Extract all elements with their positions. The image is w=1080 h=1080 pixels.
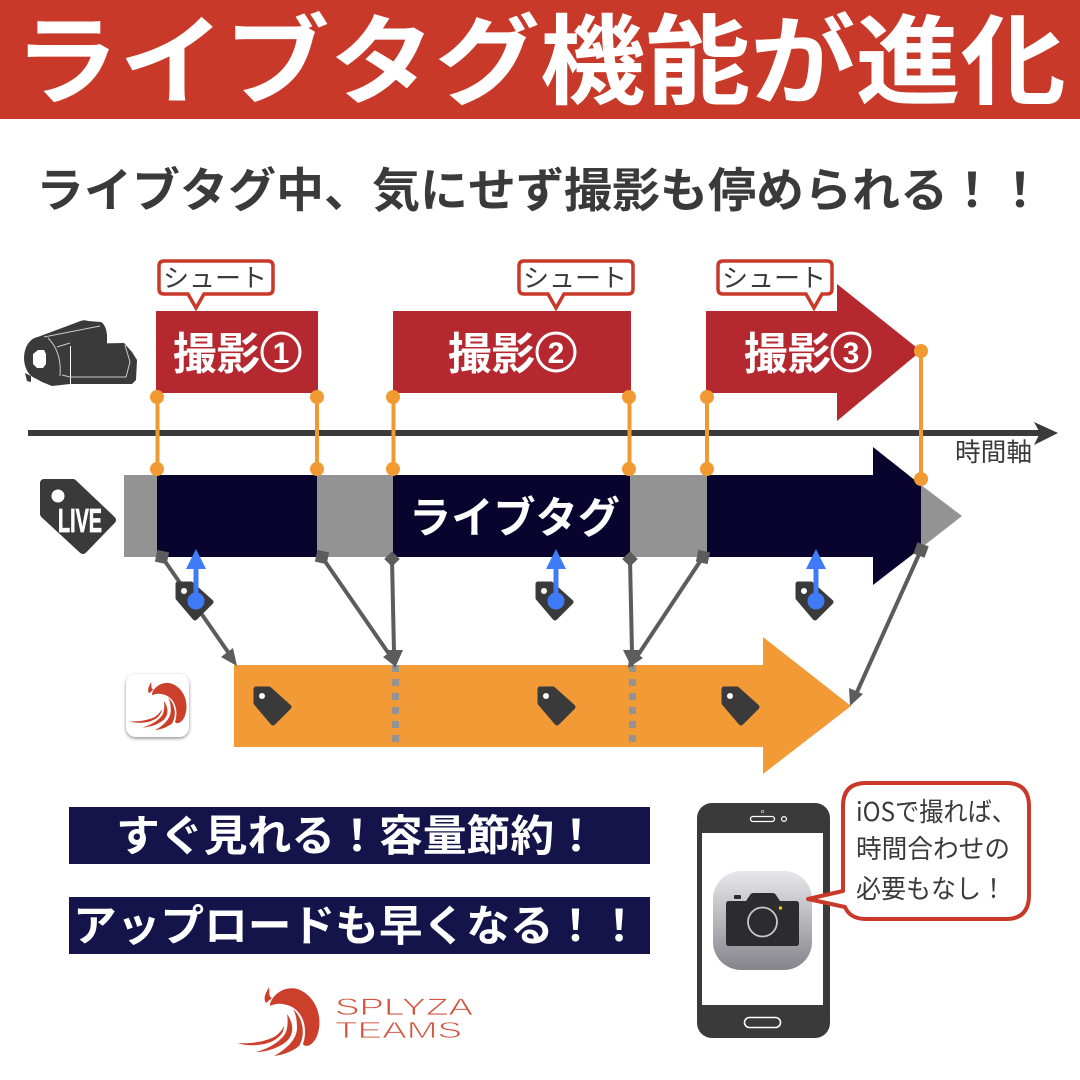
arrows: gray connectors from live bar to app bar: [155, 542, 929, 706]
callout: shoot 3: [718, 258, 832, 308]
shooting block 1: [156, 311, 318, 393]
callout: shoot 2: [519, 258, 633, 308]
callout: iOS speech bubble: 時間合わせの: [856, 829, 1010, 866]
icon: camera app: [713, 871, 812, 970]
shooting block 3 arrow: 撮影: [744, 318, 831, 382]
banner: faster upload: アップロードも早くなる！！: [73, 892, 641, 954]
shooting block 3 arrow: [706, 284, 921, 421]
dotted cut markers: [392, 665, 636, 742]
shooting block 1: 1: [273, 337, 289, 370]
subtitle: ライブタグ中、気にせず撮影も停められる！！: [36, 152, 1044, 221]
shooting block 2: 2: [548, 337, 564, 370]
callout: shoot 1: シュート: [163, 258, 267, 295]
callout: shoot 2: シュート: [523, 258, 627, 295]
callout: iOS speech bubble: iOSで撮れば、: [856, 792, 1016, 829]
icon: tag 1 with upload arrow: [178, 549, 211, 618]
time axis label: 時間軸: [955, 432, 1032, 469]
icon: tag 2 with upload arrow: [538, 549, 571, 618]
icon: LIVE tag: LIVE: [58, 502, 102, 539]
callout: shoot 3: シュート: [722, 258, 826, 295]
logo: SPLYZA TEAMS: SPLYZA: [335, 994, 473, 1021]
icon: LIVE tag: [44, 483, 112, 550]
orange app bar arrow: [234, 637, 851, 774]
shooting block 3 arrow: 3: [843, 337, 859, 370]
orange connectors: [150, 344, 928, 486]
icon: tag on app bar 1: [256, 689, 289, 723]
icon: SPLYZA app: [126, 674, 189, 737]
shooting block 1: 撮影: [173, 318, 260, 382]
icon: tag 3 with upload arrow: [798, 549, 831, 618]
logo: SPLYZA TEAMS: TEAMS: [335, 1017, 462, 1043]
icon: smartphone: [697, 803, 830, 1038]
callout: iOS speech bubble: 必要もなし！: [856, 869, 1006, 906]
icon: video camera: [24, 320, 137, 386]
live tag bar: [124, 447, 962, 585]
arrow: time axis: [28, 422, 1058, 445]
shooting block 2: [393, 311, 631, 393]
icon: tag on app bar 2: [540, 689, 573, 723]
shooting block 2: 撮影: [448, 318, 535, 382]
logo: SPLYZA TEAMS: [238, 987, 473, 1056]
icon: tag on app bar 3: [724, 689, 757, 723]
callout: iOS speech bubble: [808, 783, 1029, 919]
banner: quick view: すぐ見れる！容量節約！: [116, 802, 598, 864]
live tag bar: ライブタグ: [409, 484, 620, 546]
callout: shoot 1: [159, 258, 273, 308]
